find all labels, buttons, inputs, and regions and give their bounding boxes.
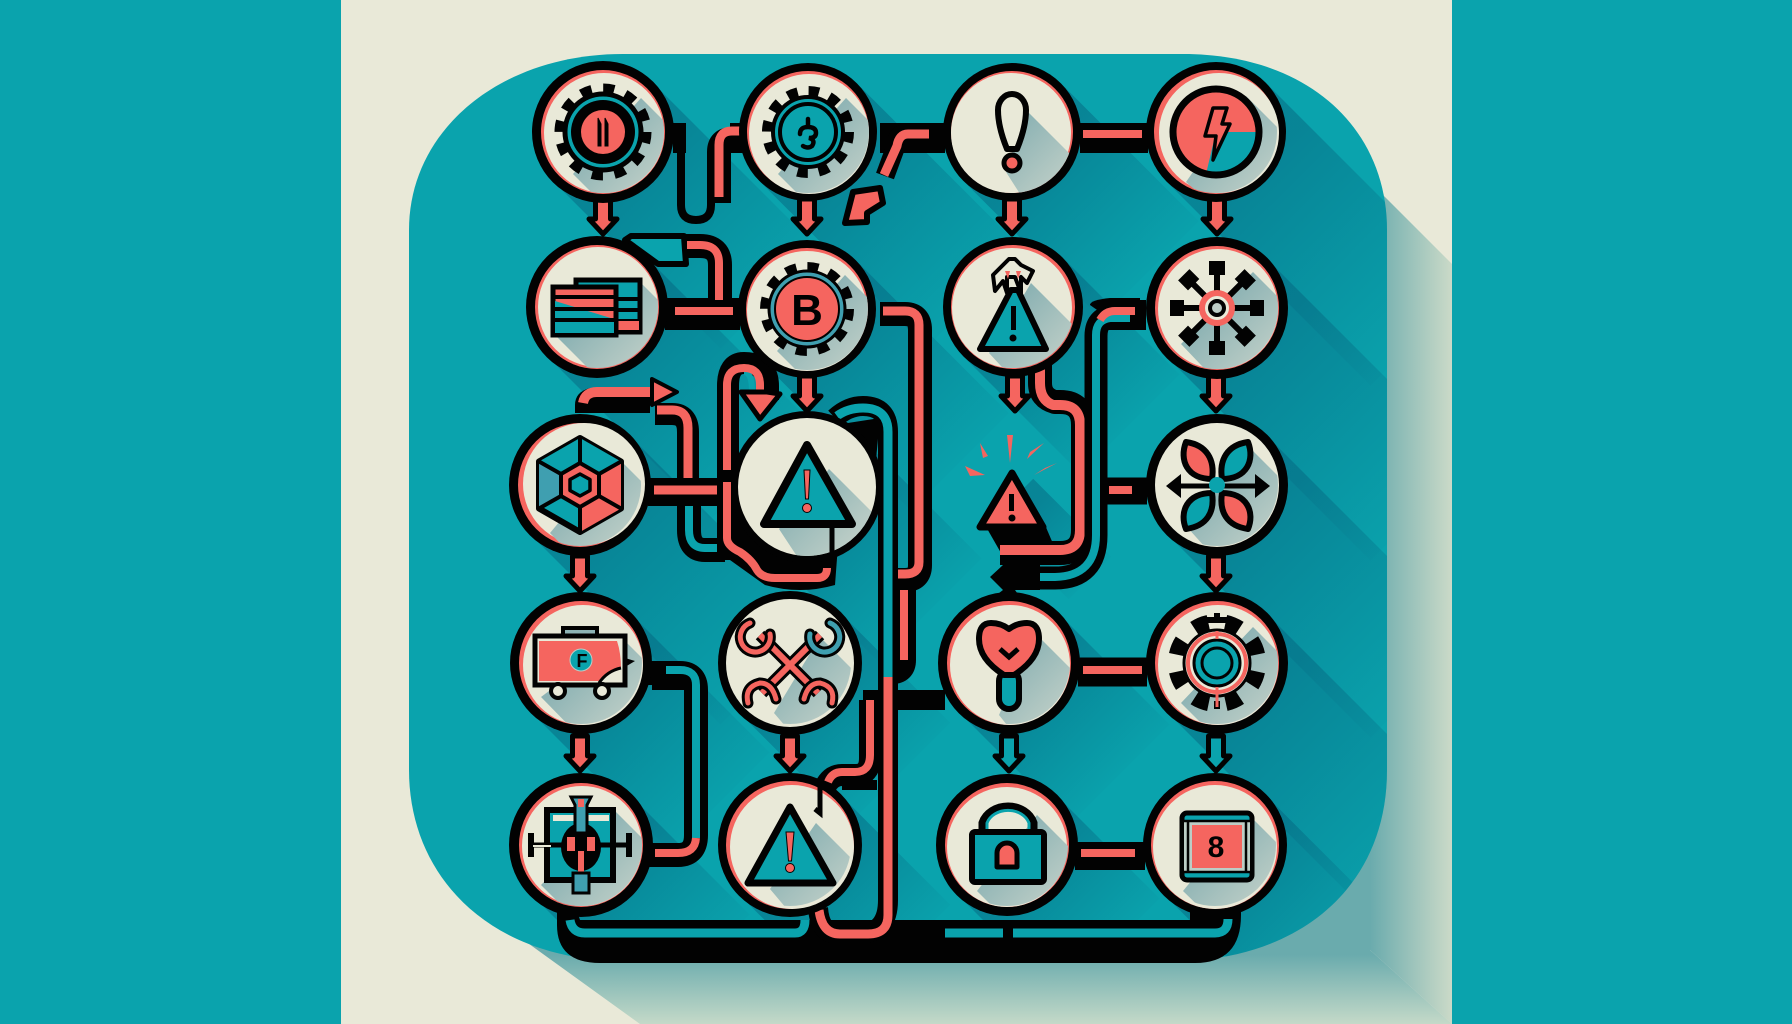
icon: radial arrows hub: [1170, 261, 1264, 355]
warning triangle with sparks (no circle): [965, 435, 1057, 527]
pipe: coral loop into warning node: [717, 363, 838, 590]
pipe: truck node to junction node: [648, 670, 696, 855]
icon: hexagon: [539, 438, 621, 532]
pipe: bottom right link: [1075, 853, 1145, 856]
pipe: third row right link: [1107, 490, 1147, 491]
pipe: fourth row right link: [1078, 670, 1147, 672]
icon: padlock: [972, 807, 1044, 882]
pipe: warning triangle coral return: [985, 360, 1083, 560]
node: crossed wrenches: [718, 591, 862, 734]
page background: cream centre panel: [341, 0, 1452, 1024]
icon: spiked gear with rings: [1164, 610, 1270, 716]
icon: stacked cards: [553, 280, 640, 335]
node: spoked hub: [1146, 237, 1288, 379]
icon: flower with double arrow: [1166, 442, 1270, 529]
node: warning triangle: [718, 773, 862, 917]
icon: framed number: [1182, 813, 1252, 880]
icon: warning triangle: [748, 780, 833, 883]
node: tanker truck: [510, 592, 652, 734]
node: target gear: [1146, 592, 1288, 734]
pipe: hexagon node to warning node: [648, 410, 740, 550]
node: gear with teal centre: [739, 63, 877, 200]
node: calendar with 8: [1143, 773, 1287, 912]
long cast shadows of nodes: [580, 132, 1420, 970]
pipe: broken link between top nodes: [845, 133, 945, 223]
pipe: teal outer loop right of warning triangle: [990, 298, 1146, 600]
icon: truck: F: [576, 651, 588, 671]
icon: gear with B coin: B: [791, 286, 823, 335]
pipe: coral arrow above hexagon node: [575, 379, 677, 418]
icon: heart key: [979, 623, 1039, 709]
icon: gear: [767, 91, 849, 173]
icon: warning triangle: [764, 445, 852, 559]
icon: framed number: 8: [1208, 831, 1224, 864]
down arrows between rows: [566, 199, 1231, 771]
node: exclamation: [944, 63, 1080, 200]
node: triangle with splash: [943, 237, 1083, 376]
node: cross junction: [509, 773, 653, 917]
teal rounded card: [409, 54, 1387, 960]
icon: warning flask: [980, 259, 1046, 349]
icon: wrenches: [740, 623, 840, 703]
pipe: top left U bend: [673, 123, 748, 220]
node: gear with tool: [532, 61, 674, 203]
icon: exclamation mark: [998, 94, 1026, 171]
node: bitcoin gear: [739, 240, 876, 378]
card long shadow: [500, 189, 1452, 1024]
icon: gear: [560, 89, 646, 175]
node: lightning dial: [1146, 62, 1286, 202]
pipe: link top right nodes: [1080, 134, 1148, 138]
icon: lightning bolt in dial: [1173, 89, 1259, 175]
icon: truck: [535, 628, 635, 698]
icon: valve cross: [529, 797, 631, 893]
node: large warning: [738, 411, 878, 557]
node: flower: [1146, 414, 1288, 556]
bottom frame pipe: [557, 905, 1241, 963]
node: padlock: [936, 774, 1078, 916]
pipe: second row left to centre: [625, 236, 740, 314]
node: hexagon gem: [509, 414, 651, 556]
node: documents: [526, 236, 668, 378]
icon: gear with B coin: [765, 267, 849, 351]
pipe: central teal and coral vertical: [818, 406, 888, 934]
diagram canvas: [341, 0, 1452, 1024]
pipe: long vertical from centre node: [863, 311, 945, 710]
node: heart key: [938, 592, 1080, 734]
